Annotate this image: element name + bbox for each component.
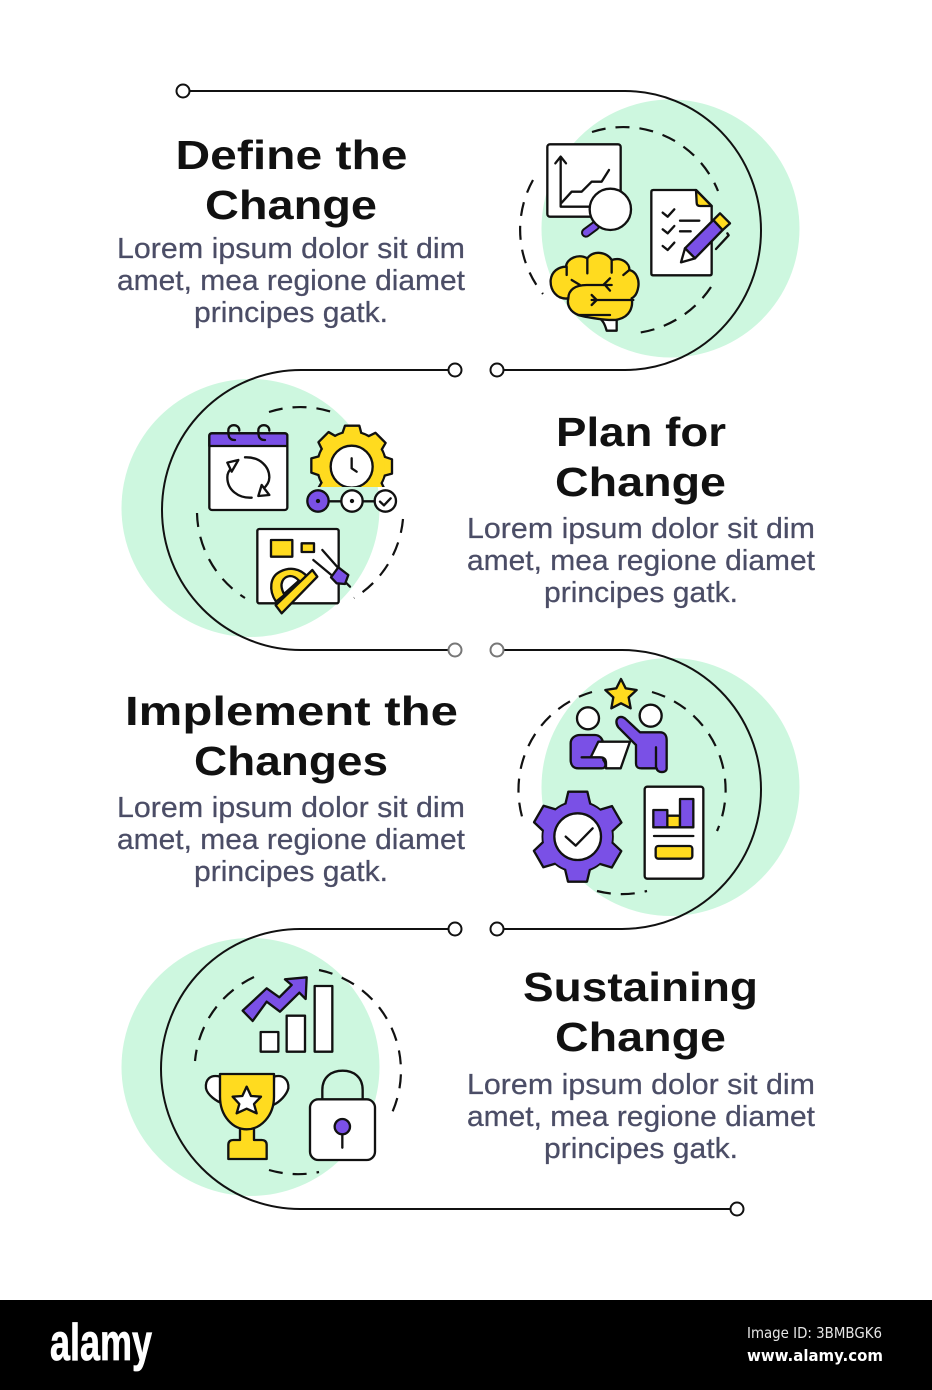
icon: calendar with cycle: [209, 425, 287, 510]
icons: chart, checklist, brain: [547, 144, 730, 331]
body text 4: amet, mea regione diamet: [467, 1101, 815, 1133]
icon: trophy: [206, 1074, 288, 1159]
body text 1: principes gatk.: [194, 297, 388, 329]
icon: gear with check: [532, 792, 623, 882]
body text 3: [117, 792, 465, 888]
body text 2: principes gatk.: [544, 577, 738, 609]
panel: define the change: [117, 100, 800, 358]
panel: implement the changes: [117, 658, 800, 916]
title: sustaining change: Change: [555, 1014, 726, 1060]
body text 1: Lorem ipsum dolor sit dim: [117, 233, 465, 265]
body text 2: amet, mea regione diamet: [467, 545, 815, 577]
icon: padlock: [310, 1071, 375, 1160]
mint circle 3: [542, 658, 800, 916]
image id: Image ID: 3BMBGK6: [747, 1324, 882, 1342]
body text 4: principes gatk.: [544, 1133, 738, 1165]
body text 4: Lorem ipsum dolor sit dim: [467, 1069, 815, 1101]
dashed ring 3: [518, 692, 726, 894]
title: define the change: Change: [205, 182, 377, 228]
icons: growth, trophy, lock: [206, 977, 375, 1160]
panel: sustaining change: [122, 938, 815, 1196]
body text 1: amet, mea regione diamet: [117, 265, 465, 297]
website: www.alamy.com: [747, 1346, 883, 1365]
icons: calendar, gear, board: [209, 425, 396, 613]
body text 2: Lorem ipsum dolor sit dim: [467, 513, 815, 545]
icon: checklist with pencil: [651, 190, 730, 275]
dashed ring 1: [520, 127, 718, 333]
icon: gear with clock: [310, 424, 394, 487]
icon: star: [605, 679, 637, 708]
footer logo: alamy: [50, 1314, 152, 1372]
icon: growth bars with arrow: [243, 977, 332, 1052]
footer bar: [0, 1300, 932, 1390]
title: plan for change: Plan for: [556, 409, 726, 455]
dashed ring 2: [197, 407, 403, 598]
icon: two people with laptop: [571, 705, 667, 772]
title: sustaining change: [523, 964, 758, 1060]
title: plan for change: Change: [555, 459, 726, 505]
icon: drawing board with protractor: [257, 529, 350, 613]
title: implement the changes: Implement the: [125, 688, 458, 734]
body text 4: [467, 1069, 815, 1165]
title: implement the changes: [125, 688, 458, 784]
panel: plan for change: [122, 379, 815, 637]
title: implement the changes: Changes: [194, 738, 388, 784]
body text 2: [467, 513, 815, 609]
body text 3: Lorem ipsum dolor sit dim: [117, 792, 465, 824]
dashed ring 4: [195, 970, 401, 1174]
title: define the change: Define the: [176, 132, 408, 178]
title: plan for change: [555, 409, 726, 505]
title: sustaining change: Sustaining: [523, 964, 758, 1010]
body text 3: principes gatk.: [194, 856, 388, 888]
icon: chart with magnifier: [547, 144, 631, 233]
mint circle 2: [122, 379, 380, 637]
icon: progress steps: [307, 490, 396, 512]
icon: report card: [645, 787, 703, 879]
mint circle 4: [122, 938, 380, 1196]
title: define the change: [176, 132, 408, 228]
icons: team, gear, report: [532, 679, 703, 882]
mint circle 1: [542, 100, 800, 358]
body text 3: amet, mea regione diamet: [117, 824, 465, 856]
body text 1: [117, 233, 465, 329]
icon: brain: [551, 253, 639, 331]
connector line with end nodes: [161, 84, 761, 1216]
